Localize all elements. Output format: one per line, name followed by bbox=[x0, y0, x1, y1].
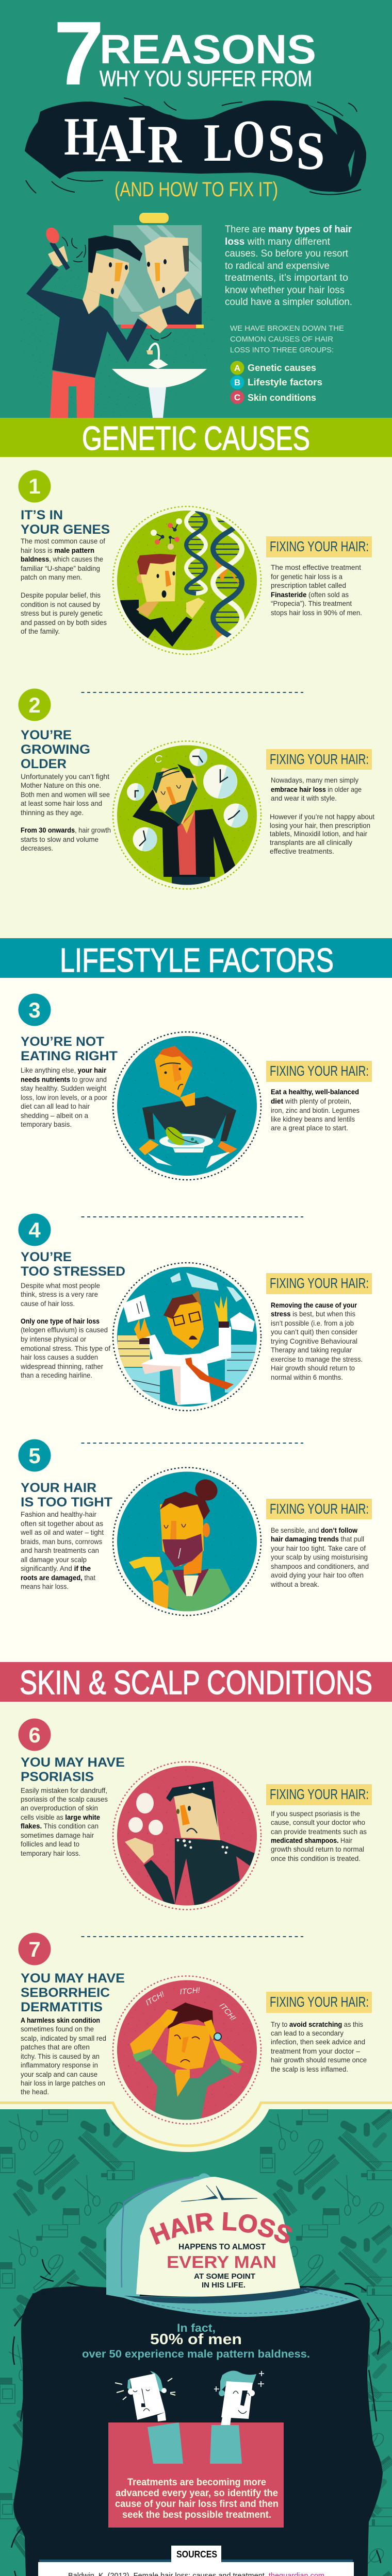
fix text 4: trying Cognitive Behavioural bbox=[271, 1337, 357, 1345]
heading 6: PSORIASIS bbox=[21, 1770, 94, 1784]
heading 2: OLDER bbox=[21, 757, 67, 771]
heading 7: SEBORRHEIC bbox=[21, 1986, 110, 2000]
body text 3: stay healthy. Sudden weight bbox=[21, 1084, 106, 1092]
body text 2: decreases. bbox=[21, 844, 53, 852]
body text 1: stress but is purely genetic bbox=[21, 609, 103, 617]
skin section background bbox=[0, 1702, 392, 2109]
legend of three groups: Skin conditions bbox=[248, 393, 316, 403]
body text 5: all damage your scalp bbox=[21, 1555, 87, 1564]
body text 5: well as oil and water – tight bbox=[20, 1528, 104, 1536]
body text 4: widespread thinning, rather bbox=[20, 1362, 103, 1370]
heading: genetic causes: GENETIC CAUSES bbox=[82, 419, 310, 457]
body text 3: needs nutrients to grow and bbox=[21, 1075, 107, 1083]
intro text: WE HAVE BROKEN DOWN THE bbox=[230, 324, 344, 333]
body text 6: cells visible as large white bbox=[21, 1813, 100, 1821]
heading 4: TOO STRESSED bbox=[21, 1264, 125, 1279]
fix text 3: are a great place to start. bbox=[271, 1124, 348, 1132]
illustration 4: stressed office worker bbox=[113, 1263, 261, 1411]
number 4: 4 bbox=[28, 1218, 41, 1242]
body text 5: and harsh treatments can bbox=[21, 1546, 99, 1554]
fix text 2: losing your hair, then prescription bbox=[270, 821, 370, 829]
body text 3: diet can all lead to hair bbox=[21, 1102, 90, 1110]
heading 2: GROWING bbox=[21, 742, 90, 757]
fix text 4 bbox=[271, 1301, 363, 1381]
fixing box 6 bbox=[266, 1784, 372, 1805]
number 7 bbox=[19, 1933, 51, 1965]
body text 1: of the family. bbox=[21, 627, 60, 635]
fix text 3: Eat a healthy, well-balanced bbox=[271, 1088, 359, 1096]
body text 6 bbox=[21, 1786, 108, 1857]
cream scoop and yellow line bbox=[0, 2103, 392, 2152]
pink panel bbox=[108, 2370, 284, 2528]
header panel background bbox=[0, 0, 392, 418]
letters HAIR LOSS: S bbox=[296, 121, 325, 181]
lifestyle section background bbox=[0, 978, 392, 1662]
letters HAIR LOSS: H bbox=[64, 106, 98, 166]
body text 1: Despite popular belief, this bbox=[21, 591, 101, 599]
fix text 6: medicated shampoos. Hair bbox=[271, 1836, 352, 1844]
fix text 5: your scalp by using moisturising bbox=[271, 1553, 368, 1561]
genetic section background bbox=[0, 457, 392, 938]
fix text 6: If you suspect psoriasis is the bbox=[271, 1809, 360, 1818]
number 6 bbox=[19, 1719, 51, 1751]
statistic text: In fact, bbox=[177, 2321, 216, 2334]
body text 1: hair loss is male pattern bbox=[21, 546, 94, 554]
body text 1: The most common cause of bbox=[21, 537, 105, 545]
body text 6: sometimes damage hair bbox=[21, 1831, 94, 1839]
illustration 5: man with tight man bun bbox=[113, 1467, 261, 1616]
body text 1: baldness, which causes the bbox=[21, 555, 103, 563]
illustration 1: man with DNA bbox=[112, 506, 262, 655]
body text 5: significantly. And if the bbox=[21, 1564, 91, 1572]
body text 4: think, stress is a very rare bbox=[21, 1290, 98, 1298]
statistic text bbox=[82, 2321, 310, 2360]
letters HAIR LOSS: O bbox=[233, 109, 265, 169]
fix text 7: can lead to a secondary bbox=[271, 2029, 344, 2037]
cap callout bbox=[106, 2173, 360, 2317]
body text 3: temporary basis. bbox=[21, 1120, 72, 1128]
illustration 3: man with small salad bbox=[113, 1032, 261, 1180]
legend of three groups: Genetic causes bbox=[248, 363, 316, 373]
body text 3: shedding – albeit on a bbox=[21, 1111, 88, 1120]
statistic text: 50% of men bbox=[150, 2331, 242, 2348]
letters HAIR LOSS bbox=[64, 105, 325, 181]
intro text: know whether your hair loss bbox=[225, 285, 345, 296]
number 2 bbox=[19, 688, 51, 721]
heading 7: YOU MAY HAVE bbox=[21, 1971, 125, 1986]
body text 4: hair loss causes a sudden bbox=[21, 1353, 98, 1361]
fix text 7: the scalp is less inflamed. bbox=[271, 2065, 348, 2073]
fix text 5: hair damaging trends that pull bbox=[271, 1535, 364, 1543]
heading 6 bbox=[21, 1755, 125, 1784]
body text 7: scalp, indicated by small red bbox=[21, 2034, 106, 2042]
illustration 7: man scratching scalp: ITCH! bbox=[218, 2002, 238, 2023]
fix text 2: embrace hair loss in older age bbox=[271, 785, 362, 793]
intro text: to radical and expensive bbox=[225, 261, 330, 272]
intro text: LOSS INTO THREE GROUPS: bbox=[230, 346, 334, 354]
number 7: 7 bbox=[28, 1937, 41, 1961]
fixing box 5 bbox=[266, 1499, 372, 1519]
heading 1: IT’S IN bbox=[21, 508, 63, 522]
fix text 6 bbox=[271, 1809, 367, 1862]
body text 5: Fashion and healthy-hair bbox=[21, 1510, 96, 1518]
fix text 4: exercise to manage the stress. bbox=[271, 1355, 363, 1363]
body text 2: Unfortunately you can’t fight bbox=[21, 772, 109, 781]
body text 4: emotional stress. This type of bbox=[21, 1344, 110, 1352]
fix text 7 bbox=[271, 2020, 367, 2073]
number 6: 6 bbox=[28, 1723, 41, 1747]
cap callout: HAIR LOSS bbox=[150, 2212, 292, 2245]
heading 2 bbox=[21, 728, 90, 771]
body text 2 bbox=[21, 772, 111, 852]
body text 5: means hair loss. bbox=[21, 1582, 69, 1590]
subtitle: (AND HOW TO FIX IT) bbox=[115, 178, 278, 201]
heading 5: IS TOO TIGHT bbox=[21, 1495, 112, 1510]
heading 3: YOU’RE NOT bbox=[21, 1035, 104, 1049]
body text 3: loss, low iron levels, or a poor bbox=[21, 1093, 107, 1101]
fix text 6: once this condition is treated. bbox=[271, 1854, 361, 1862]
fix text 3: diet with plenty of protein, bbox=[271, 1097, 351, 1105]
illustration 7: man scratching scalp: ITCH! bbox=[144, 1990, 167, 2007]
illustration: man at mirror bbox=[18, 213, 214, 418]
number 5 bbox=[19, 1439, 51, 1471]
fix text 1: Finasteride (often sold as bbox=[271, 590, 349, 599]
footer patterned background bbox=[0, 2109, 392, 2576]
intro text: treatments, it’s important to bbox=[225, 273, 348, 283]
body text 2: thinning as they age. bbox=[21, 808, 84, 817]
title: 7 bbox=[54, 3, 104, 104]
body text 6: Easily mistaken for dandruff, bbox=[21, 1786, 107, 1794]
fix text 4: normal within 6 months. bbox=[271, 1373, 343, 1381]
body text 7: hair loss in large patches on bbox=[21, 2079, 105, 2087]
body text 6: flakes. This condition can bbox=[21, 1822, 99, 1830]
heading 4: YOU’RE bbox=[21, 1250, 72, 1264]
fix text 7: hair growth should resume once bbox=[271, 2056, 367, 2064]
panel message: seek the best possible treatment. bbox=[122, 2509, 271, 2520]
body text 7: sometimes found on the bbox=[21, 2025, 94, 2033]
heading 5 bbox=[21, 1481, 112, 1510]
body text 4: cause of hair loss. bbox=[21, 1299, 75, 1308]
intro text: loss with many different bbox=[225, 236, 331, 247]
fix text 2: transplants are all clinically bbox=[270, 838, 352, 846]
fixing box 4 bbox=[266, 1273, 372, 1294]
statistic text: over 50 experience male pattern baldness. bbox=[82, 2348, 310, 2360]
letters HAIR LOSS: L bbox=[204, 112, 233, 173]
bottom hair silhouette bbox=[11, 2259, 383, 2576]
body text 2: Mother Nature on this one. bbox=[21, 781, 101, 789]
body text 5 bbox=[20, 1510, 104, 1590]
fix text 6: can provide treatments such as bbox=[271, 1827, 367, 1836]
number 4 bbox=[19, 1214, 51, 1246]
body text 5: often sit together about as bbox=[21, 1519, 103, 1528]
intro text: There are many types of hair bbox=[225, 224, 352, 235]
heading 2: YOU’RE bbox=[21, 728, 72, 742]
fix text 2: However if you’re not happy about bbox=[270, 812, 374, 821]
title bbox=[54, 3, 316, 104]
fix text 5: without a break. bbox=[270, 1580, 319, 1588]
panel message bbox=[115, 2477, 279, 2520]
fix text 5: Be sensible, and don’t follow bbox=[271, 1526, 357, 1534]
fix text 1: “Propecia”). This treatment bbox=[271, 599, 352, 607]
fix text 5: your hair too tight. Take care of bbox=[271, 1544, 366, 1552]
body text 2: From 30 onwards, hair growth bbox=[21, 826, 111, 834]
cap callout: HAPPENS TO ALMOST bbox=[178, 2243, 266, 2251]
heading 3 bbox=[21, 1035, 118, 1063]
letters HAIR LOSS: A bbox=[95, 113, 131, 173]
heading 7 bbox=[21, 1971, 125, 2014]
letters HAIR LOSS: R bbox=[148, 114, 182, 174]
body text 5: roots are damaged, that bbox=[21, 1573, 95, 1582]
fix text 4: Removing the cause of your bbox=[271, 1301, 357, 1309]
illustration 2: ageing man and clocks: C bbox=[155, 754, 162, 765]
number 5: 5 bbox=[28, 1444, 41, 1468]
illustration 2: ageing man and clocks bbox=[113, 741, 261, 891]
heading 5: YOUR HAIR bbox=[21, 1481, 96, 1495]
number 3 bbox=[19, 993, 51, 1026]
legend of three groups: A bbox=[234, 363, 240, 373]
legend of three groups bbox=[230, 361, 322, 404]
fix text 2: effective treatments. bbox=[270, 847, 334, 855]
body text 7 bbox=[21, 2016, 106, 2096]
two men illustration bbox=[115, 2370, 264, 2464]
body text 7: A harmless skin condition bbox=[21, 2016, 100, 2024]
fixing box 2 bbox=[266, 749, 372, 770]
body text 7: your scalp and can cause bbox=[21, 2070, 97, 2078]
cap callout: EVERY MAN bbox=[167, 2252, 276, 2272]
fix text 5 bbox=[270, 1526, 369, 1588]
legend of three groups: Lifestyle factors bbox=[248, 377, 322, 387]
fix text 1: stops hair loss in 90% of men. bbox=[271, 608, 362, 617]
cap callout: IN HIS LIFE. bbox=[202, 2281, 246, 2290]
heading 4 bbox=[21, 1250, 125, 1279]
panel message: Treatments are becoming more bbox=[127, 2477, 266, 2488]
fix text 4: stress is best, but when this bbox=[271, 1310, 355, 1318]
fix text 1: prescription tablet called bbox=[271, 581, 346, 589]
title: REASONS bbox=[100, 26, 316, 72]
intro text: causes. So before you resort bbox=[225, 248, 349, 259]
body text 1 bbox=[21, 537, 107, 635]
heading 3: EATING RIGHT bbox=[21, 1049, 118, 1063]
body text 7: the head. bbox=[21, 2088, 49, 2096]
fix text 7: Try to avoid scratching as this bbox=[271, 2020, 363, 2028]
fix text 4: you can’t quit) then consider bbox=[271, 1328, 357, 1336]
body text 5: braids, man buns, cornrows bbox=[21, 1537, 102, 1546]
body text 4: Despite what most people bbox=[21, 1281, 100, 1290]
panel message: advanced every year, so identify the bbox=[116, 2487, 278, 2499]
body text 4: (telogen effluvium) is caused bbox=[21, 1326, 108, 1334]
body text 3: Like anything else, your hair bbox=[21, 1066, 107, 1074]
hair loss moustache title bbox=[25, 98, 366, 195]
cap callout: AT SOME POINT bbox=[194, 2272, 255, 2281]
body text 6: follicles and lead to bbox=[21, 1840, 79, 1848]
fix text 4: isn’t possible (i.e. from a job bbox=[271, 1319, 354, 1327]
body text 2: at least some hair loss and bbox=[21, 799, 102, 807]
sources panel bbox=[38, 2546, 354, 2576]
fix text 2: tablets, Minoxidil lotion, and hair bbox=[270, 829, 367, 838]
fix text 1: The most effective treatment bbox=[271, 563, 361, 571]
intro text bbox=[225, 224, 352, 354]
sources panel: SOURCES bbox=[176, 2549, 217, 2560]
fix text 6: cause, consult your doctor who bbox=[271, 1818, 365, 1826]
fix text 5: avoid dying your hair too often bbox=[271, 1571, 364, 1579]
legend of three groups: B bbox=[234, 378, 240, 387]
fix text 6: growth should return to normal bbox=[271, 1845, 364, 1853]
legend of three groups: C bbox=[234, 393, 240, 402]
letters HAIR LOSS: S bbox=[268, 113, 295, 173]
fix text 3 bbox=[271, 1088, 360, 1132]
body text 6: an overproduction of skin bbox=[21, 1804, 98, 1812]
intro text: COMMON CAUSES OF HAIR bbox=[230, 335, 333, 344]
number 1: 1 bbox=[28, 474, 41, 498]
body text 1: familiar “U-shape” balding bbox=[21, 564, 100, 572]
fix text 7: infection, then seek advice and bbox=[271, 2038, 365, 2046]
number 2: 2 bbox=[28, 693, 41, 717]
fix text 5: shampoos and conditioners, and bbox=[271, 1562, 369, 1570]
fix text 3: like kidney beans and lentils bbox=[271, 1115, 355, 1123]
fix text 7: treatment from your doctor – bbox=[271, 2047, 360, 2055]
fix text 4: Therapy and taking regular bbox=[271, 1346, 352, 1354]
body text 2: Both men and women will see bbox=[21, 790, 110, 799]
number 1 bbox=[19, 470, 51, 503]
fix text 1 bbox=[271, 563, 362, 617]
body text 7: inflammatory response in bbox=[21, 2061, 98, 2069]
illustration 7: man scratching scalp: ITCH! bbox=[179, 1986, 201, 1996]
heading 7: DERMATITIS bbox=[21, 2000, 103, 2014]
intro text: could have a simpler solution. bbox=[225, 297, 352, 308]
body text 1: condition is not caused by bbox=[21, 600, 100, 608]
heading 1: YOUR GENES bbox=[21, 522, 110, 537]
body text 4: than a receding hairline. bbox=[21, 1371, 92, 1379]
body text 6: psoriasis of the scalp causes bbox=[21, 1795, 108, 1803]
letters HAIR LOSS: I bbox=[127, 105, 146, 165]
panel message: cause of your hair loss first and then bbox=[115, 2498, 279, 2510]
fixing box 3 bbox=[266, 1061, 372, 1082]
body text 4: Only one type of hair loss bbox=[21, 1317, 100, 1325]
body text 2: starts to slow and volume bbox=[21, 835, 99, 843]
body text 6: temporary hair loss. bbox=[21, 1849, 80, 1857]
fix text 1: for genetic hair loss is a bbox=[271, 572, 342, 581]
heading 6: YOU MAY HAVE bbox=[21, 1755, 125, 1770]
body text 7: itchy. This is caused by an bbox=[21, 2052, 100, 2060]
title: WHY YOU SUFFER FROM bbox=[100, 66, 312, 91]
fix text 3: iron, zinc and biotin. Legumes bbox=[271, 1106, 360, 1114]
fix text 2: and wear it with style. bbox=[271, 794, 337, 802]
body text 3 bbox=[21, 1066, 107, 1128]
body text 1: and passed on by both sides bbox=[21, 618, 107, 626]
body text 1: patch on many men. bbox=[21, 573, 82, 581]
fix text 2 bbox=[270, 776, 374, 855]
body text 4: by intense physical or bbox=[21, 1335, 86, 1343]
fix text 2: Nowadays, many men simply bbox=[271, 776, 358, 784]
fixing box 7 bbox=[266, 1992, 372, 2013]
illustration 6: man with psoriasis flakes bbox=[113, 1762, 261, 1909]
illustration 7: man scratching scalp bbox=[113, 1976, 261, 2124]
fix text 4: Hair growth should return to bbox=[271, 1364, 355, 1372]
number 3: 3 bbox=[28, 998, 41, 1022]
fixing box 1 bbox=[266, 536, 372, 557]
body text 4 bbox=[20, 1281, 110, 1379]
body text 7: patches that are often bbox=[21, 2043, 90, 2051]
heading 1 bbox=[21, 508, 110, 537]
